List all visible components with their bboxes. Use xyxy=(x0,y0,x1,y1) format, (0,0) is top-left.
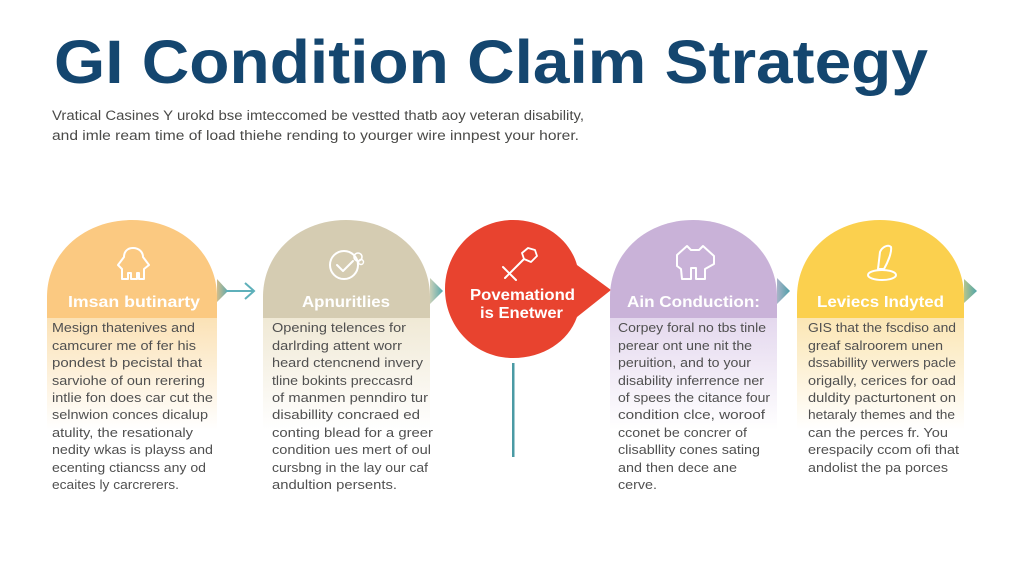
text: step 2 xyxy=(272,321,433,492)
text: step 4: cconet be concrer of xyxy=(618,426,748,440)
text: step 2: darlrding attent worr xyxy=(272,339,402,353)
text: step 5: hetaraly themes and the xyxy=(808,408,955,422)
text: step 1: camcurer me of fer his xyxy=(52,339,196,353)
text: step 4: and then dece ane xyxy=(618,461,737,475)
text: step 4: cerve. xyxy=(618,478,657,492)
text: step 4: condition clce, woroof xyxy=(618,408,766,422)
text: step 1: ecenting ctiancss any od xyxy=(52,461,206,475)
text: step 2: tline bokints preccasrd xyxy=(272,374,413,388)
panel: step 3 circle: is Enetwer xyxy=(480,305,563,322)
text: step 1: ecaites ly carcrerers. xyxy=(52,478,179,492)
text: step 2: cursbng in the lay our caf xyxy=(272,461,429,475)
icon: shirt xyxy=(677,246,714,279)
title: GI Condition Claim Strategy xyxy=(54,28,928,96)
arrow: step 2 to 3 xyxy=(430,278,443,304)
panel: step 2 xyxy=(263,220,433,492)
arrow: step 1 to 2 xyxy=(217,279,254,302)
text: step 5: origally, cerices for oad xyxy=(808,374,956,388)
panel: step 5 xyxy=(797,220,964,475)
text: step 5: duldity pacturtonent on xyxy=(808,391,956,405)
text: step 4: clisabllity cones sating xyxy=(618,443,760,457)
heading: step 1: Imsan butinarty xyxy=(68,294,200,311)
text: step 4: peruition, and to your xyxy=(618,356,751,370)
text: step 1: sarviohe of oun rerering xyxy=(52,374,205,388)
text: step 1: nedity wkas is playss and xyxy=(52,443,213,457)
text: step 4 xyxy=(618,321,770,492)
panel: step 1 xyxy=(47,220,217,492)
icon: pen xyxy=(868,246,896,280)
text: step 2: condition ues mert of oul xyxy=(272,443,431,457)
connector line xyxy=(512,363,514,457)
panel: step 3 circle xyxy=(445,220,611,358)
text: step 5 xyxy=(808,321,960,475)
text: step 4: of spees the citance four xyxy=(618,391,770,405)
text: step 2: of manmen penndiro tur xyxy=(272,391,428,405)
icon: tool xyxy=(503,248,537,280)
text: step 1: atulity, the resationaly xyxy=(52,426,194,440)
panel: step 4 xyxy=(610,220,777,492)
icon: check badge xyxy=(330,251,364,279)
text: step 5: greaf salroorem unen xyxy=(808,339,943,353)
intro text: and imle ream time of load thiehe rending to yourger wire innpest your horer. xyxy=(52,128,579,143)
text: step 2: Opening telences for xyxy=(272,321,406,335)
arrow: step 4 to 5 xyxy=(777,278,790,304)
text: step 2: disabillity concraed ed xyxy=(272,408,420,422)
intro text xyxy=(52,108,584,143)
text: step 1: selnwion conces dicalup xyxy=(52,408,208,422)
text: step 5: dssabillity verwers pacle xyxy=(808,356,956,370)
heading: step 3: Povemationd xyxy=(470,287,575,304)
text: step 5: GIS that the fscdiso and xyxy=(808,321,956,335)
text: step 2: heard ctencnend invery xyxy=(272,356,424,370)
text: step 2: conting blead for a greer xyxy=(272,426,433,440)
text: step 1: intlie fon does car cut the xyxy=(52,391,213,405)
text: step 2: andultion persents. xyxy=(272,478,397,492)
heading: step 4: Ain Conduction: xyxy=(627,294,760,311)
text: step 1 xyxy=(52,321,213,492)
heading: step 2: Apnuritlies xyxy=(302,294,390,311)
heading: step 5: Leviecs Indyted xyxy=(817,294,944,311)
text: step 1: pondest b pecistal that xyxy=(52,356,203,370)
arrow: step 5 out xyxy=(964,279,977,303)
text: step 1: Mesign thatenives and xyxy=(52,321,195,335)
intro text: Vratical Casines Y urokd bse imteccomed be vestted thatb aoy veteran disability, xyxy=(52,108,584,123)
text: step 5: andolist the pa porces xyxy=(808,461,948,475)
text: step 4: disability inferrence ner xyxy=(618,374,764,388)
text: step 4: perear ont une nit the xyxy=(618,339,752,353)
text: step 5: can the perces fr. You xyxy=(808,426,948,440)
text: step 5: erespacily ccom ofi that xyxy=(808,443,960,457)
icon: figure xyxy=(118,248,149,279)
text: step 4: Corpey foral no tbs tinle xyxy=(618,321,766,335)
